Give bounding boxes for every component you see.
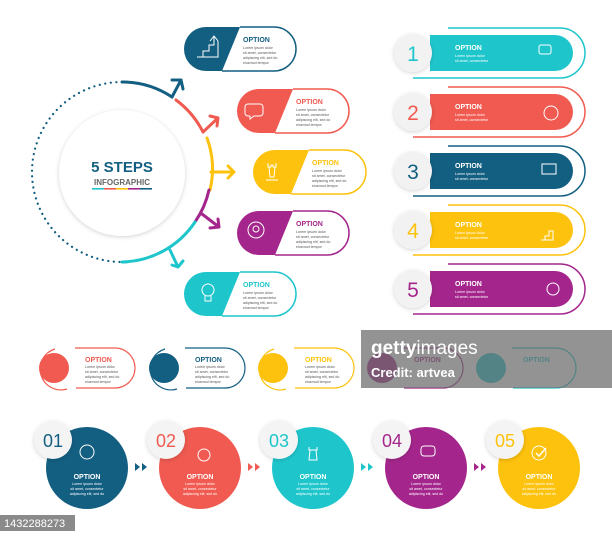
small card coral: adipiscing elit, sed do — [85, 375, 119, 379]
card: option 3 yellow — [253, 150, 366, 194]
row 5 — [394, 264, 585, 314]
small card coral: eiusmod tempor — [85, 380, 112, 384]
card: option 5 teal: Lorem ipsum dolor — [243, 291, 274, 295]
step 04: 04 — [382, 431, 402, 451]
small card yellow: adipiscing elit, sed do — [305, 375, 339, 379]
step 03: OPTION — [300, 474, 326, 481]
watermark overlay — [361, 330, 612, 388]
chevrons — [361, 463, 373, 471]
small card navy: eiusmod tempor — [195, 380, 222, 384]
panel: numbered list right — [394, 28, 585, 314]
step 01 — [34, 421, 128, 509]
step 03: sit amet, consectetur — [296, 487, 330, 491]
step 03 — [260, 421, 354, 509]
center circle — [59, 110, 185, 236]
row 3: 3 — [407, 161, 419, 184]
card: option 2 coral: sit amet, consectetur — [296, 113, 330, 117]
step 05: 05 — [495, 431, 515, 451]
step 04: OPTION — [413, 474, 439, 481]
step 01: Lorem ipsum dolor — [72, 482, 103, 486]
watermark overlay: Credit: artvea — [371, 365, 456, 380]
card: option 2 coral — [237, 89, 349, 133]
step 04: Lorem ipsum dolor — [411, 482, 442, 486]
step 05 — [486, 421, 580, 509]
small card coral: sit amet, consectetur — [85, 370, 119, 374]
small card coral: OPTION — [85, 357, 112, 364]
card: option 5 teal — [184, 272, 296, 316]
step 02 — [147, 421, 241, 509]
row 1 — [394, 28, 585, 78]
card: option 4 purple: Lorem ipsum dolor — [296, 230, 327, 234]
small card navy — [149, 348, 245, 390]
row 5: 5 — [407, 279, 419, 302]
row 1: 1 — [407, 43, 419, 66]
small card yellow — [258, 348, 354, 390]
title: 5 STEPS — [91, 159, 153, 176]
small card purple: OPTION — [414, 357, 441, 364]
step 04: sit amet, consectetur — [409, 487, 443, 491]
row 3 — [394, 146, 585, 196]
row 2: sit amet, consectetur — [455, 118, 489, 122]
card: option 3 yellow: Lorem ipsum dolor — [312, 169, 343, 173]
card: option 4 purple — [237, 211, 349, 255]
small card teal: OPTION — [523, 357, 550, 364]
card: option 4 purple: OPTION — [296, 221, 323, 228]
chevrons — [135, 463, 147, 471]
watermark overlay: gettyimages — [371, 338, 478, 359]
step 01: 01 — [43, 431, 63, 451]
card: option 5 teal: eiusmod tempor — [243, 306, 270, 310]
card: option 2 coral: Lorem ipsum dolor — [296, 108, 327, 112]
step 05: OPTION — [526, 474, 552, 481]
small card yellow: sit amet, consectetur — [305, 370, 339, 374]
card: option 1 navy: OPTION — [243, 37, 270, 44]
row 3: OPTION — [455, 163, 482, 170]
row 2: Lorem ipsum dolor — [455, 113, 486, 117]
arrow: purple — [195, 190, 219, 228]
step 02: OPTION — [187, 474, 213, 481]
card: option 5 teal: sit amet, consectetur — [243, 296, 277, 300]
arrow: teal — [122, 222, 195, 267]
card: option 4 purple: sit amet, consectetur — [296, 235, 330, 239]
small card navy: Lorem ipsum dolor — [195, 365, 226, 369]
row 1: sit amet, consectetur — [455, 59, 489, 63]
row 4: OPTION — [455, 222, 482, 229]
card: option 3 yellow: adipiscing elit, sed do — [312, 179, 346, 183]
row 2: 2 — [407, 102, 419, 125]
row 5: Lorem ipsum dolor — [455, 290, 486, 294]
card: option 5 teal: OPTION — [243, 282, 270, 289]
row 3: Lorem ipsum dolor — [455, 172, 486, 176]
row 2: OPTION — [455, 104, 482, 111]
arrow: yellow — [207, 138, 234, 190]
small card navy: OPTION — [195, 357, 222, 364]
center circle: INFOGRAPHIC — [94, 178, 150, 187]
row 5: sit amet, consectetur — [455, 295, 489, 299]
step 02: 02 — [156, 431, 176, 451]
small card coral — [39, 348, 135, 390]
small card yellow: eiusmod tempor — [305, 380, 332, 384]
card: option 2 coral: eiusmod tempor — [296, 123, 323, 127]
small card yellow: OPTION — [305, 357, 332, 364]
step 05: adipiscing elit, sed do — [522, 492, 556, 496]
row 4: Lorem ipsum dolor — [455, 231, 486, 235]
step 03: adipiscing elit, sed do — [296, 492, 330, 496]
card: option 2 coral: OPTION — [296, 99, 323, 106]
card: option 1 navy: Lorem ipsum dolor — [243, 46, 274, 50]
chevrons — [474, 463, 486, 471]
row 4 — [394, 205, 585, 255]
card: option 1 navy: sit amet, consectetur — [243, 51, 277, 55]
small card navy: sit amet, consectetur — [195, 370, 229, 374]
step 01: adipiscing elit, sed do — [70, 492, 104, 496]
row 1: Lorem ipsum dolor — [455, 54, 486, 58]
card: option 3 yellow: OPTION — [312, 160, 339, 167]
step 05: Lorem ipsum dolor — [524, 482, 555, 486]
dotted outer arc — [32, 82, 122, 262]
step 05: sit amet, consectetur — [522, 487, 556, 491]
row 5: OPTION — [455, 281, 482, 288]
panel: 5 steps circle diagram — [32, 80, 234, 267]
step 04 — [373, 421, 467, 509]
step 02: Lorem ipsum dolor — [185, 482, 216, 486]
card: option 5 teal: adipiscing elit, sed do — [243, 301, 277, 305]
card: option 1 navy: eiusmod tempor — [243, 61, 270, 65]
card: option 1 navy: adipiscing elit, sed do — [243, 56, 277, 60]
step 01: OPTION — [74, 474, 100, 481]
panel: numbered circle steps — [34, 421, 580, 509]
card: option 3 yellow: sit amet, consectetur — [312, 174, 346, 178]
chevrons — [248, 463, 260, 471]
small card navy: adipiscing elit, sed do — [195, 375, 229, 379]
row 4: sit amet, consectetur — [455, 236, 489, 240]
step 02: sit amet, consectetur — [183, 487, 217, 491]
small card purple — [367, 348, 463, 388]
card: option 4 purple: adipiscing elit, sed do — [296, 240, 330, 244]
arrow: navy — [122, 80, 183, 97]
row 2 — [394, 87, 585, 137]
small card coral: Lorem ipsum dolor — [85, 365, 116, 369]
card: option 3 yellow: eiusmod tempor — [312, 184, 339, 188]
card: option 2 coral: adipiscing elit, sed do — [296, 118, 330, 122]
row 4: 4 — [407, 220, 419, 243]
panel: small option cards row — [39, 348, 576, 390]
card: option 4 purple: eiusmod tempor — [296, 245, 323, 249]
image id label — [0, 515, 75, 531]
step 04: adipiscing elit, sed do — [409, 492, 443, 496]
image id label: 1432288273 — [4, 518, 65, 530]
small card teal — [476, 348, 576, 388]
card: option 1 navy — [184, 27, 296, 71]
step 02: adipiscing elit, sed do — [183, 492, 217, 496]
small card yellow: Lorem ipsum dolor — [305, 365, 336, 369]
row 3: sit amet, consectetur — [455, 177, 489, 181]
step 01: sit amet, consectetur — [70, 487, 104, 491]
step 03: Lorem ipsum dolor — [298, 482, 329, 486]
arrow: coral — [176, 100, 218, 132]
step 03: 03 — [269, 431, 289, 451]
row 1: OPTION — [455, 45, 482, 52]
